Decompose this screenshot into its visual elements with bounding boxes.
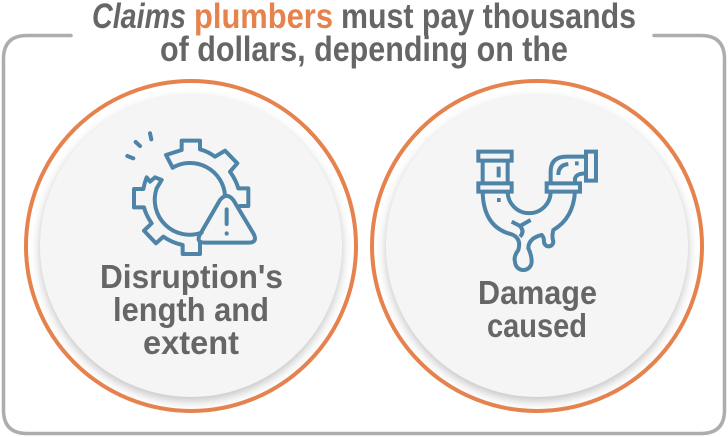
panel: disruption	[26, 81, 356, 411]
label: disruption: extent	[143, 324, 239, 361]
title: of dollars, depending on the	[160, 30, 568, 69]
inner disc left	[40, 95, 342, 397]
icon: broken gear with warning	[127, 133, 255, 254]
label: disruption	[100, 258, 283, 361]
label: disruption: Disruption's	[100, 258, 283, 295]
inner disc right	[386, 95, 688, 397]
orange ring left	[26, 81, 356, 411]
panel: damage	[372, 81, 702, 411]
orange ring right	[372, 81, 702, 411]
label: damage: caused	[487, 307, 587, 344]
label: disruption: length and	[113, 291, 269, 328]
label: damage	[478, 274, 597, 344]
title	[92, 0, 636, 69]
shadow right	[386, 99, 688, 401]
shadow left	[40, 99, 342, 401]
icon: leaking pipe	[478, 152, 596, 270]
label: damage: Damage	[478, 274, 597, 311]
